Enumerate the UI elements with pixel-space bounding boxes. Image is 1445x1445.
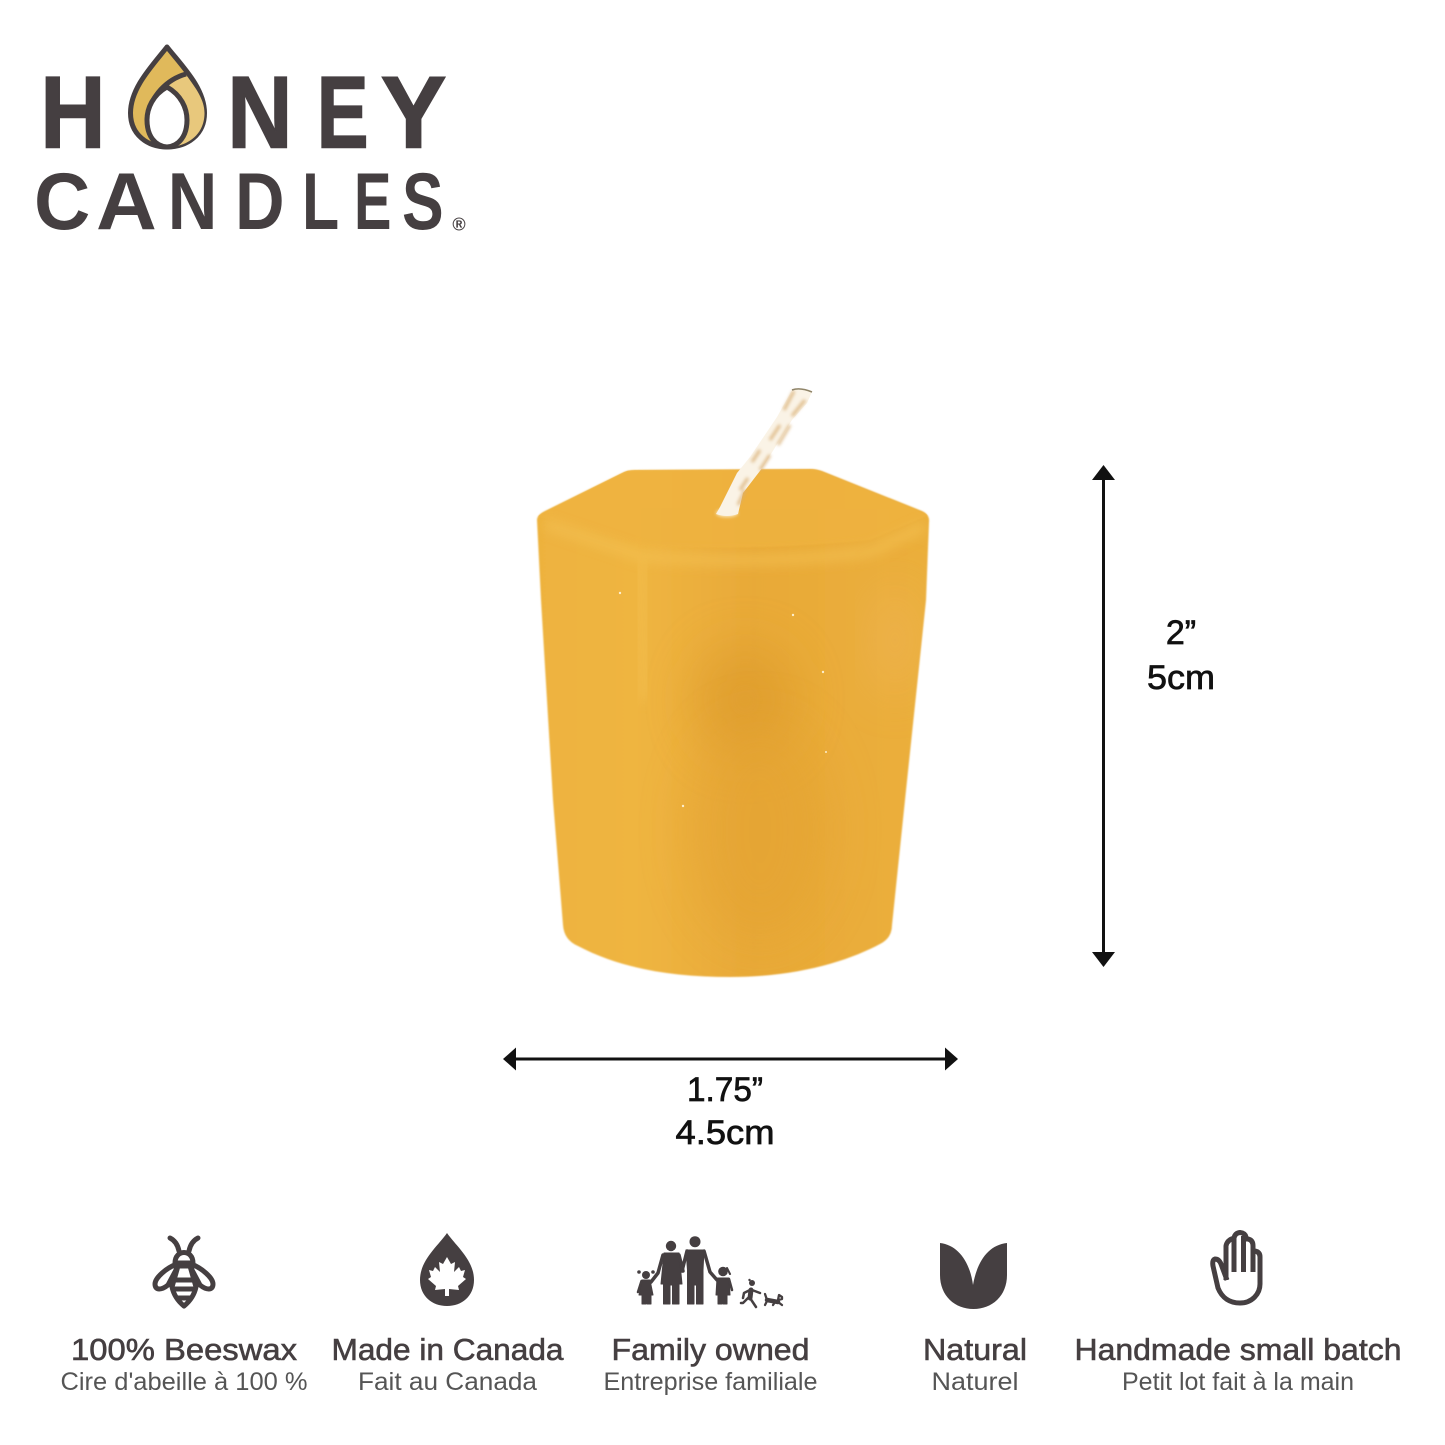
logo word: HONEY: E — [317, 56, 369, 170]
height label: 5cm — [1147, 659, 1215, 697]
logo word: CANDLES: S — [402, 158, 444, 247]
width arrow — [503, 1048, 958, 1070]
logo: Honey Candles — [34, 47, 466, 247]
logo icon: flame drop — [130, 47, 204, 147]
feature: Handmade small batch — [1074, 1232, 1402, 1396]
logo word: CANDLES: N — [168, 156, 217, 246]
feature: Family owned — [604, 1236, 818, 1396]
height label — [1147, 614, 1215, 697]
candle wick — [716, 389, 812, 517]
feature title: Made in Canada — [332, 1332, 564, 1367]
width label — [676, 1071, 774, 1152]
candle shading — [538, 469, 928, 808]
logo word: HONEY — [40, 56, 446, 170]
width label: 1.75” — [687, 1071, 763, 1109]
logo registered mark: ® — [452, 214, 466, 234]
feature subtitle: Naturel — [932, 1368, 1018, 1396]
height label: 2” — [1166, 614, 1196, 652]
icon: leaf — [940, 1243, 1007, 1309]
candle photo — [537, 389, 929, 977]
width label: 4.5cm — [676, 1114, 774, 1152]
feature title: Natural — [923, 1332, 1027, 1367]
candle body — [537, 469, 929, 977]
logo word: CANDLES: L — [302, 157, 339, 247]
logo word: CANDLES — [34, 156, 444, 247]
icon: bee — [155, 1238, 213, 1306]
logo word: HONEY: N — [227, 56, 292, 170]
feature subtitle: Entreprise familiale — [604, 1368, 818, 1396]
feature title: 100% Beeswax — [71, 1332, 298, 1367]
feature subtitle: Cire d'abeille à 100 % — [60, 1368, 308, 1396]
icon: hand — [1213, 1232, 1260, 1303]
icon: family — [637, 1236, 782, 1307]
logo word: CANDLES: A — [96, 157, 157, 247]
logo word: HONEY: Y — [381, 56, 446, 170]
feature subtitle: Fait au Canada — [358, 1368, 537, 1396]
feature title: Family owned — [612, 1332, 810, 1367]
feature subtitle: Petit lot fait à la main — [1122, 1368, 1354, 1396]
height arrow — [1092, 465, 1115, 967]
feature: 100% Beeswax — [60, 1238, 308, 1396]
icon: drop with maple leaf — [420, 1233, 474, 1306]
feature: Natural — [923, 1243, 1027, 1396]
feature title: Handmade small batch — [1074, 1332, 1402, 1367]
feature: Made in Canada — [332, 1233, 564, 1396]
logo word: CANDLES: C — [34, 156, 90, 246]
logo word: HONEY: H — [40, 56, 105, 170]
logo word: CANDLES: E — [354, 156, 391, 246]
logo word: CANDLES: D — [235, 156, 285, 246]
